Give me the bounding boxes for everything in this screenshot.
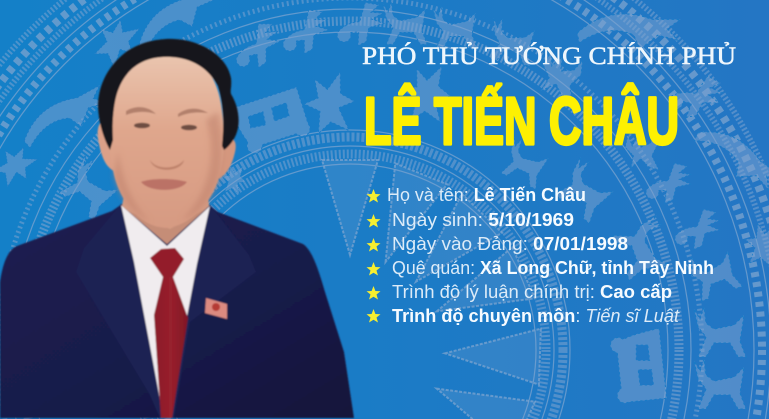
eyebrows [126, 107, 156, 115]
lapels [76, 204, 256, 418]
row: professional qualification: Trình độ chuyên môn: Tiến sĩ Luật [392, 305, 680, 326]
suit jacket [0, 204, 354, 418]
row: date of birth: Ngày sinh: 5/10/1969 [392, 209, 574, 230]
mouth [141, 179, 187, 190]
row: party admission date: Ngày vào Đảng: 07/01/1998 [392, 233, 628, 254]
eyes [134, 123, 150, 128]
biography list [366, 184, 714, 326]
neck [122, 185, 209, 244]
hair [98, 39, 239, 150]
row: hometown: Quê quán: Xã Long Chữ, tỉnh Tây Ninh [392, 257, 714, 278]
row: full name: Họ và tên: Lê Tiến Châu [387, 184, 586, 205]
title: position: PHÓ THỦ TƯỚNG CHÍNH PHỦ [362, 42, 736, 70]
tie [150, 248, 188, 418]
shirt [121, 205, 210, 400]
face [108, 52, 224, 228]
face side shading [114, 112, 222, 222]
row: political theory level: Trình độ lý luận chính trị: Cao cấp [392, 281, 672, 302]
ears [98, 120, 116, 172]
party pin [205, 298, 227, 319]
portrait [0, 39, 354, 418]
nose shading [150, 160, 184, 170]
